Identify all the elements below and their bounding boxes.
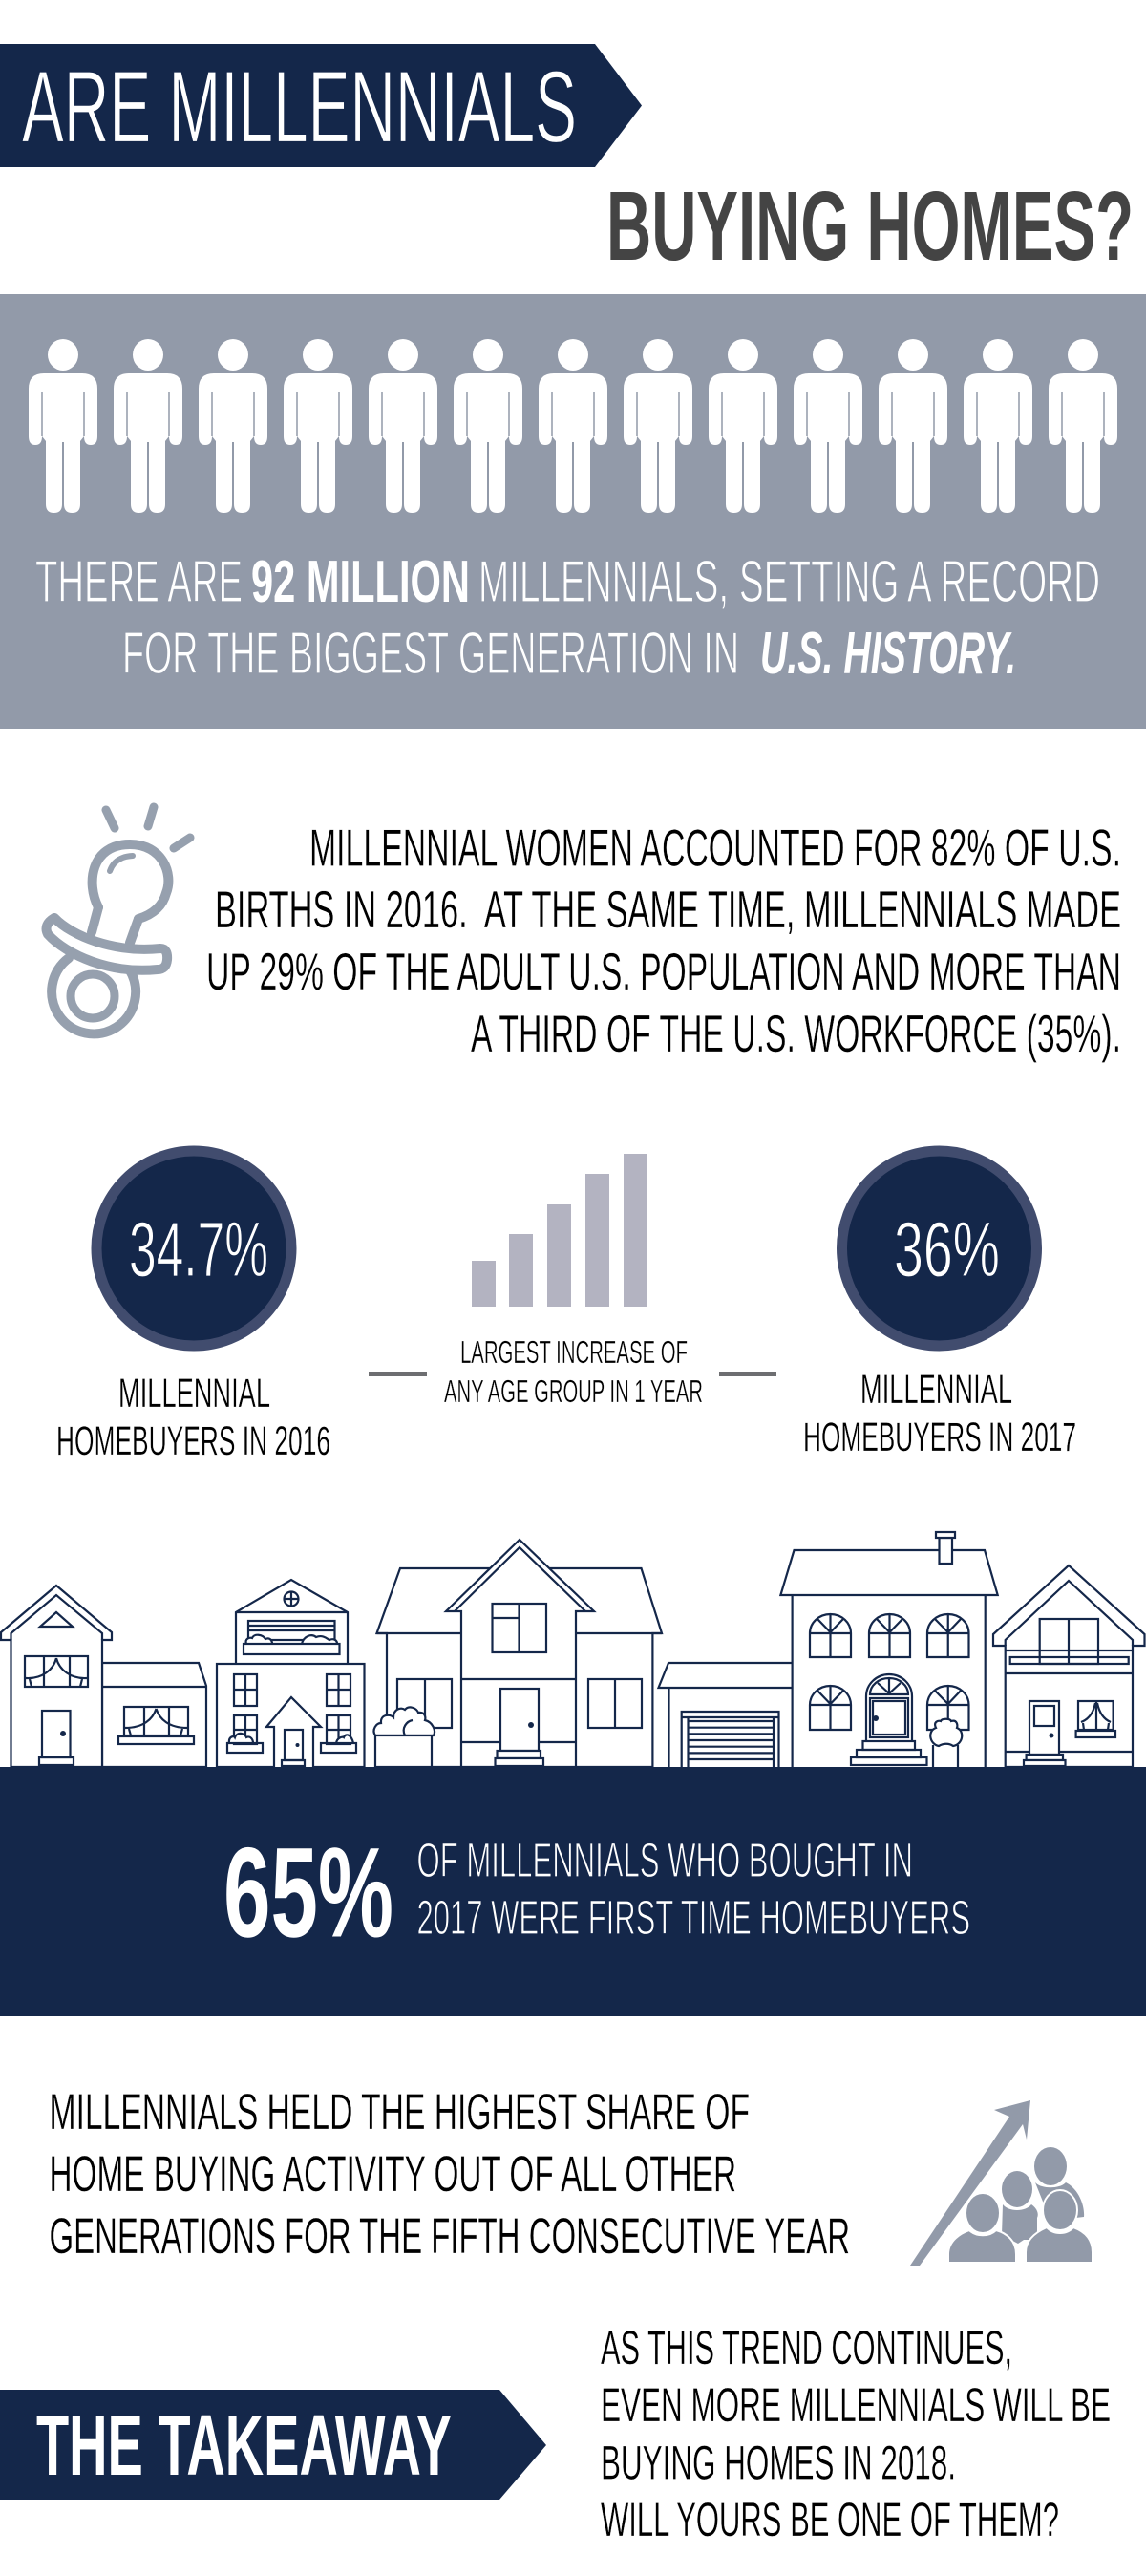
panel: 92 million millennials	[0, 294, 1146, 729]
text: highest share paragraph	[50, 2084, 850, 2265]
banner: the takeaway	[0, 2390, 546, 2500]
house 4 with garage	[659, 1532, 998, 1767]
text: highest share paragraph: HOME BUYING ACTIVITY OUT OF ALL OTHER	[50, 2146, 736, 2203]
label: homebuyers 2016: MILLENNIAL	[118, 1372, 270, 1416]
house 2	[217, 1580, 365, 1767]
text: largest increase: ANY AGE GROUP IN 1 YEAR	[444, 1374, 703, 1410]
illustration: row of houses	[1, 1532, 1144, 1767]
label: homebuyers 2016	[56, 1372, 330, 1464]
banner: the takeaway: THE TAKEAWAY	[36, 2398, 452, 2494]
text: 92 million statement: FOR THE BIGGEST GENERATION IN	[122, 621, 739, 687]
connector: left dash	[369, 1372, 427, 1376]
text: largest increase	[444, 1335, 703, 1410]
text: highest share paragraph: MILLENNIALS HELD THE HIGHEST SHARE OF	[50, 2084, 750, 2140]
connector: right dash	[719, 1372, 776, 1376]
text: 92 million statement: 92 MILLION	[251, 549, 470, 615]
icon: pacifier	[47, 807, 190, 1033]
panel: 65 percent first time homebuyers: 65%	[223, 1822, 393, 1964]
stat circle: 36%	[842, 1151, 1037, 1346]
house 5	[993, 1565, 1144, 1767]
text: largest increase: LARGEST INCREASE OF	[460, 1335, 688, 1371]
icon: people with rising arrow	[910, 2100, 1093, 2266]
title banner: are millennials: ARE MILLENNIALS	[22, 50, 577, 164]
stat circle: 34.7%: 34.7%	[129, 1206, 268, 1293]
panel: 65 percent first time homebuyers	[0, 1767, 1146, 2016]
title banner: are millennials	[0, 44, 642, 167]
icon row: people	[29, 339, 1117, 513]
text: 92 million statement: THERE ARE	[35, 549, 243, 615]
text: closing statement	[601, 2320, 1111, 2546]
stat circle: 34.7%	[96, 1151, 291, 1346]
text: 92 million statement	[35, 549, 1100, 687]
bar chart: rising bars	[472, 1154, 647, 1307]
stat circle: 36%: 36%	[894, 1206, 1000, 1293]
label: homebuyers 2016: HOMEBUYERS IN 2016	[56, 1419, 330, 1464]
house 3	[374, 1540, 662, 1767]
label: homebuyers 2017: MILLENNIAL	[860, 1368, 1012, 1413]
label: homebuyers 2017	[803, 1368, 1076, 1460]
house 1	[1, 1586, 206, 1767]
text: births and workforce paragraph	[206, 818, 1121, 1063]
